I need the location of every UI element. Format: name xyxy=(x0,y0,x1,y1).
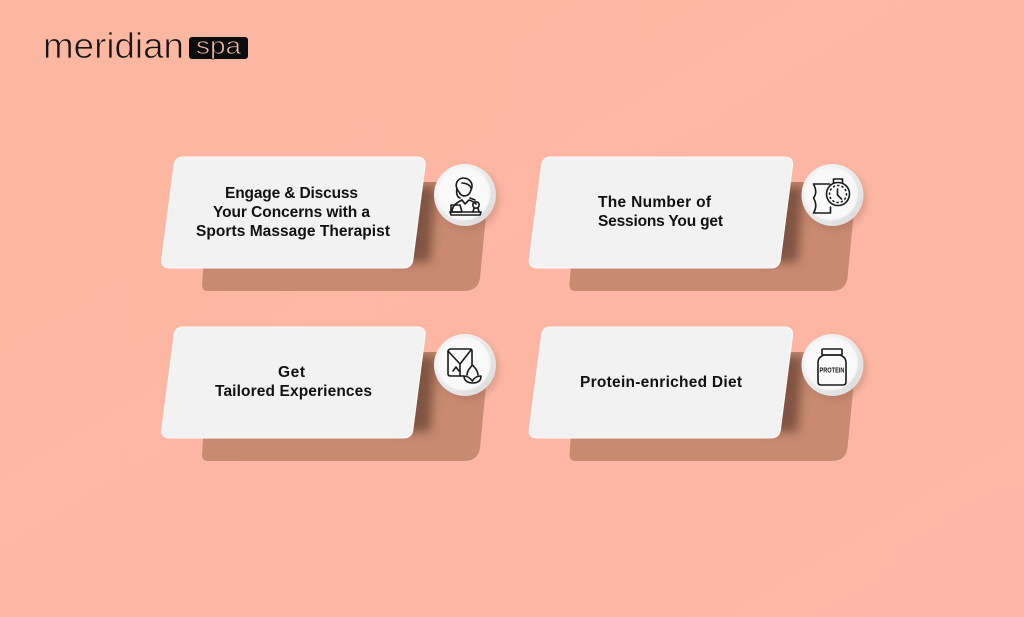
heading: engage and discuss: Your Concerns with a xyxy=(213,204,370,221)
heading: tailored experiences: Get xyxy=(278,364,305,381)
icon: protein jar: PROTEIN xyxy=(820,368,844,374)
logo wordmark: meridian xyxy=(43,25,184,66)
icon: protein jar xyxy=(818,349,846,385)
icon: therapist xyxy=(450,178,481,215)
icon: stopwatch on body xyxy=(814,179,850,213)
logo badge xyxy=(189,33,248,60)
panel: tailored experiences xyxy=(162,327,499,461)
panel: protein diet xyxy=(529,327,866,461)
panel: engage and discuss xyxy=(162,157,499,291)
heading: number of sessions: Sessions You get xyxy=(598,213,723,230)
icon: robe and lotus xyxy=(448,349,481,383)
heading: engage and discuss: Engage & Discuss xyxy=(225,185,358,202)
panel: number of sessions xyxy=(529,157,866,291)
heading: tailored experiences: Tailored Experiences xyxy=(215,383,372,400)
logo xyxy=(43,25,248,66)
heading: number of sessions: The Number of xyxy=(598,194,712,211)
heading: engage and discuss: Sports Massage Therapist xyxy=(196,223,390,240)
logo badge: spa xyxy=(196,33,242,60)
heading: protein diet: Protein-enriched Diet xyxy=(580,374,742,391)
